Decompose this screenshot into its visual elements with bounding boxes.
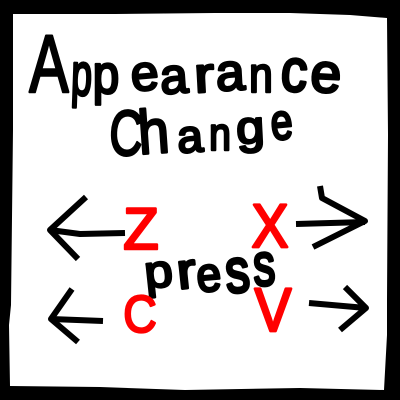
label: press: s bbox=[222, 235, 252, 306]
title line: Change: e bbox=[268, 92, 295, 151]
title line: Appearance: e bbox=[309, 41, 343, 105]
label: press: e bbox=[194, 246, 223, 302]
title line: Change: g bbox=[235, 101, 266, 154]
title line: Change: h bbox=[136, 97, 171, 168]
title line: Change: n bbox=[209, 109, 231, 161]
title line: Appearance: e bbox=[128, 44, 161, 102]
title bbox=[29, 19, 343, 170]
title line: Appearance: p bbox=[93, 43, 119, 105]
title line: Change: a bbox=[175, 109, 205, 163]
key letter Z: Z bbox=[123, 197, 159, 262]
key letter X: X bbox=[252, 192, 288, 261]
title line: Appearance: a bbox=[158, 47, 190, 105]
title line: Appearance: A bbox=[29, 19, 69, 110]
title line: Appearance bbox=[29, 19, 343, 110]
title line: Appearance: n bbox=[249, 47, 273, 103]
arrow: top left bbox=[50, 197, 125, 259]
label: press bbox=[142, 232, 277, 306]
title line: Appearance: p bbox=[70, 41, 93, 109]
key letter C: C bbox=[123, 285, 157, 344]
key letter V: V bbox=[255, 276, 292, 345]
arrow: bottom left bbox=[51, 289, 103, 342]
title line: Appearance: c bbox=[279, 36, 310, 105]
title line: Change: C bbox=[108, 97, 145, 170]
arrow: bottom right bbox=[309, 287, 366, 330]
label: press: p bbox=[142, 245, 175, 299]
arrow: top right bbox=[296, 186, 365, 247]
label: press: s bbox=[251, 232, 277, 299]
title line: Appearance: a bbox=[214, 43, 246, 103]
label: press: r bbox=[174, 243, 199, 300]
title line: Change bbox=[108, 92, 295, 170]
title line: Appearance: r bbox=[193, 46, 216, 103]
